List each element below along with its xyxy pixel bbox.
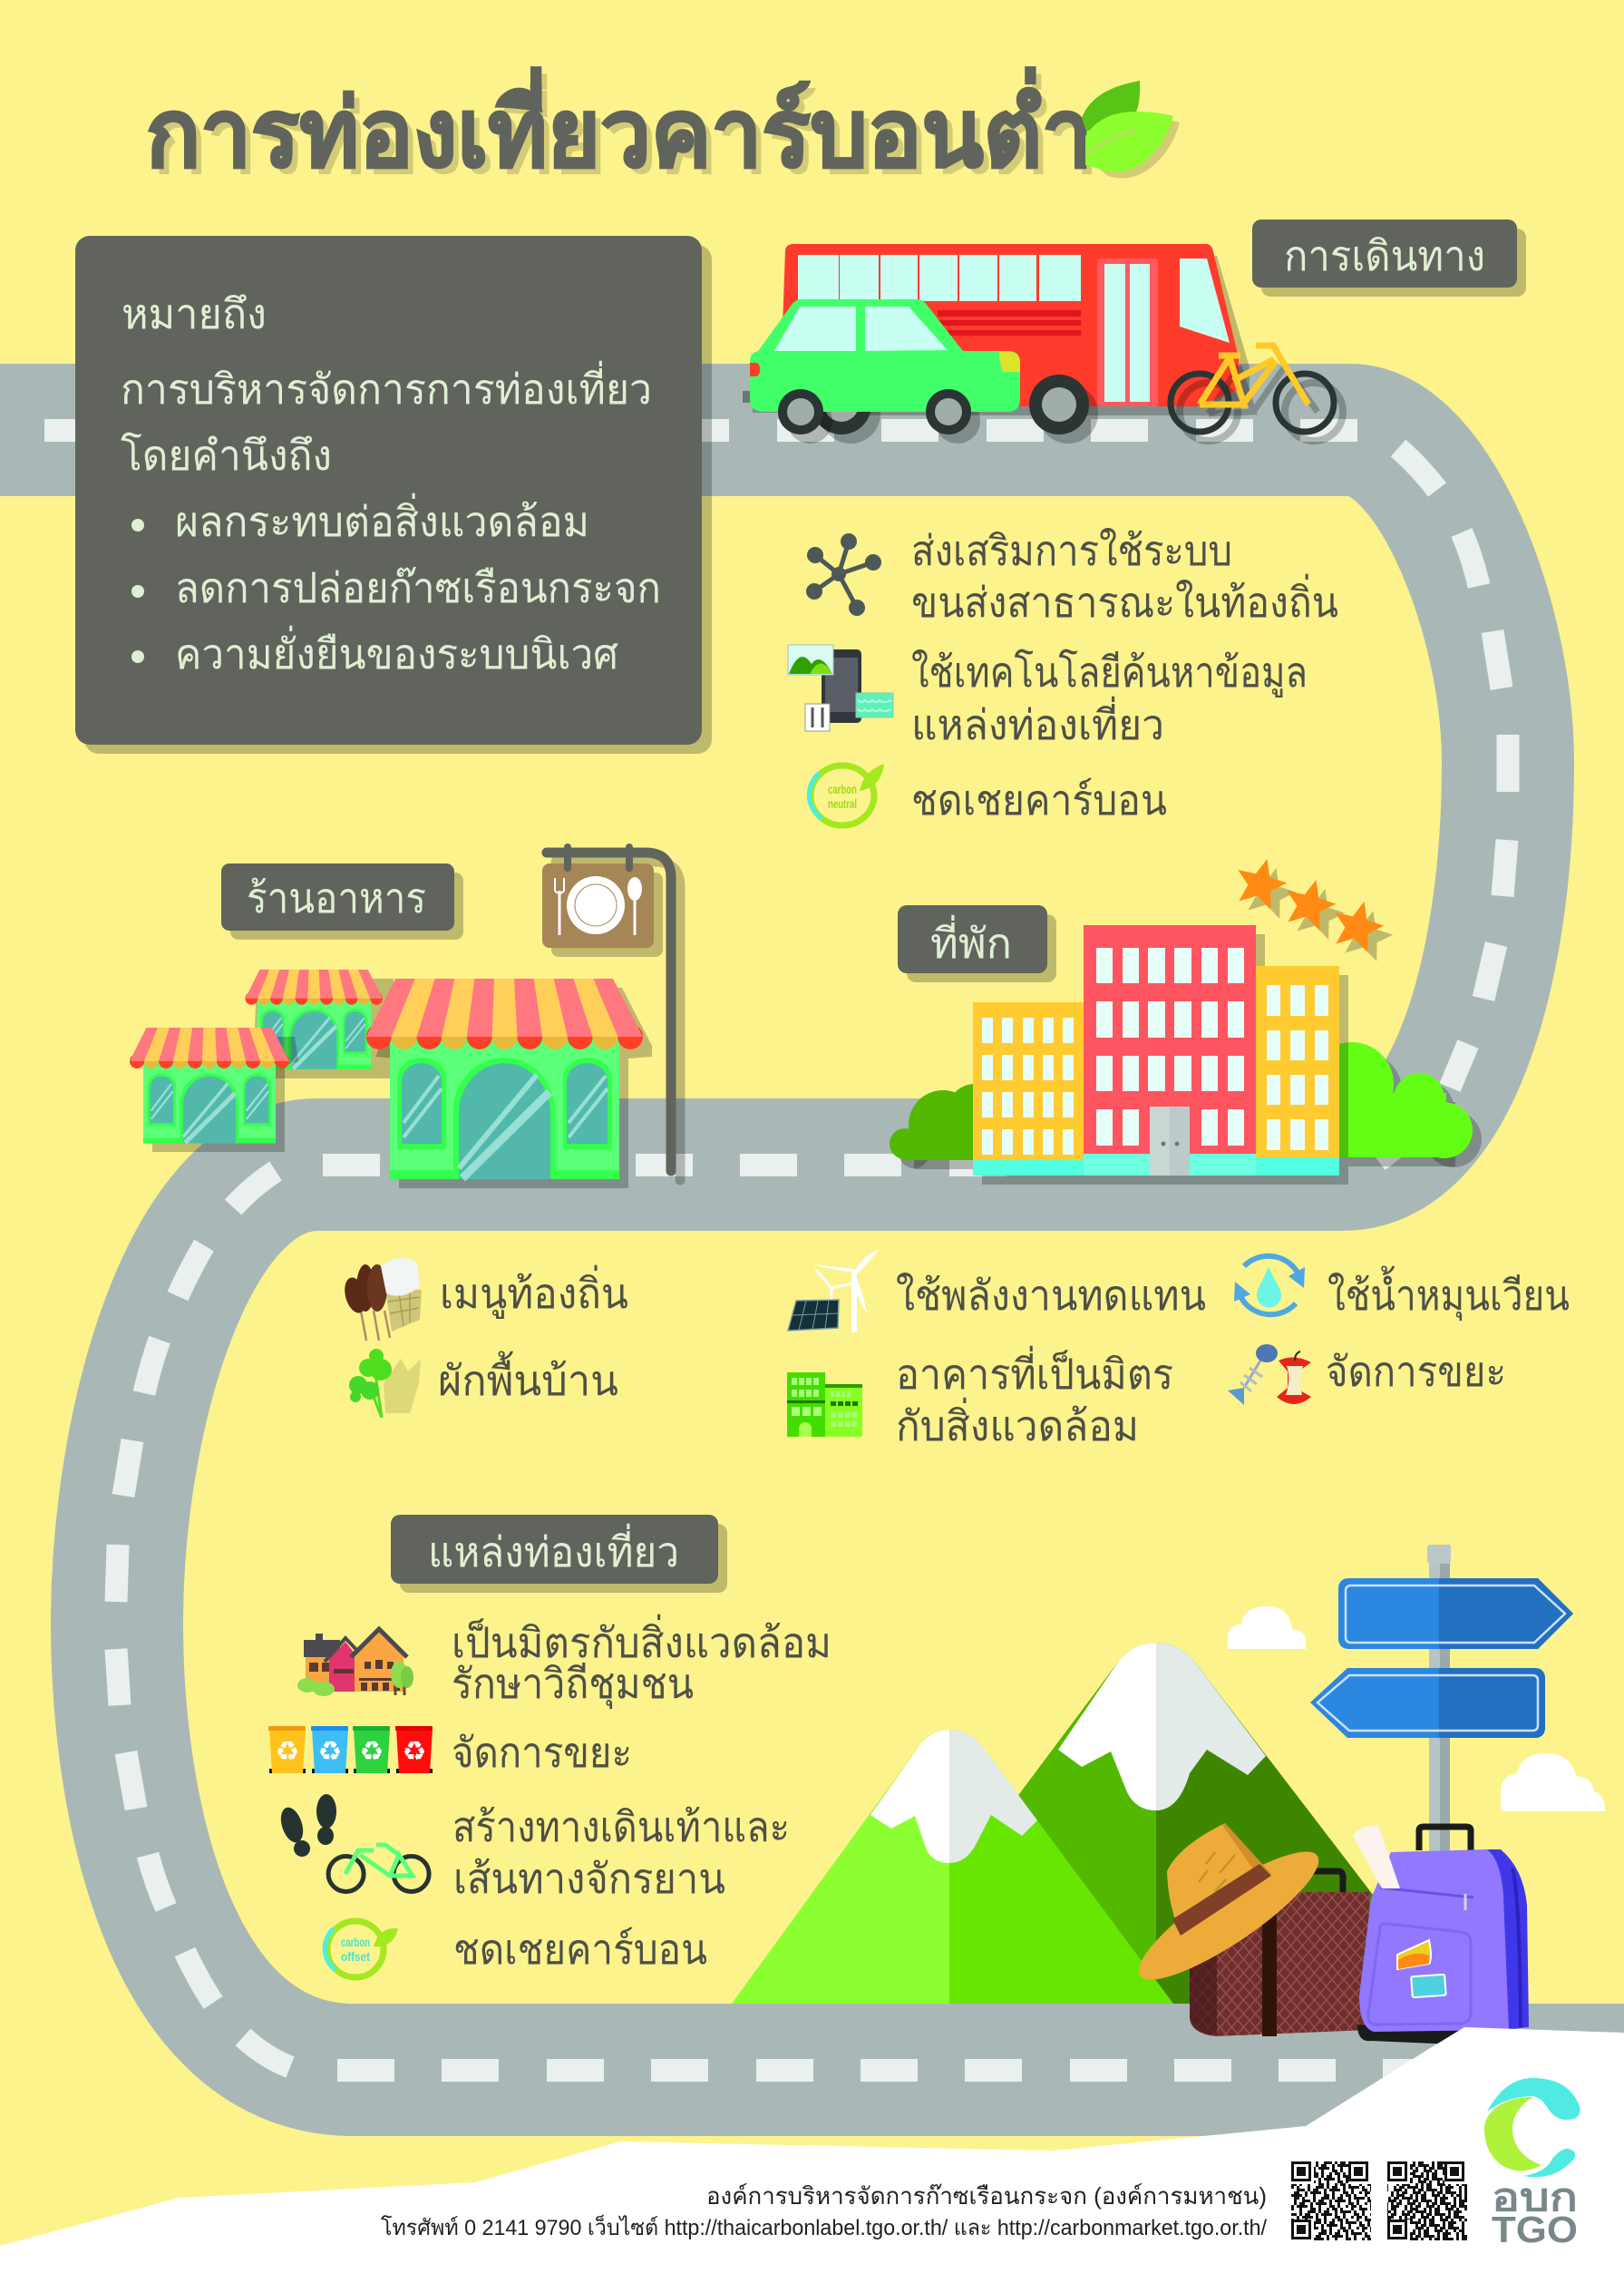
icon: three stars xyxy=(1230,853,1398,963)
text: walking and cycling paths xyxy=(452,1803,790,1902)
text: renewable energy: ใช้พลังงานทดแทน xyxy=(896,1272,1206,1319)
text: green building: อาคารที่เป็นมิตร xyxy=(896,1345,1173,1398)
icon: carbon neutral: carbon xyxy=(828,782,857,796)
label: attractions xyxy=(391,1515,727,1593)
illustration: brown suitcase xyxy=(1190,1871,1369,2036)
icon: recycling bins: ♻ xyxy=(318,1737,342,1767)
QR code 2 xyxy=(1387,2161,1467,2240)
text: public transport: ขนส่งสาธารณะในท้องถิ่น xyxy=(911,573,1338,626)
icon: water recycling xyxy=(1234,1256,1305,1314)
icon: local vegetables xyxy=(349,1349,421,1418)
icon: recycling bins: ♻ xyxy=(276,1737,299,1767)
icon: recycling bins: ♻ xyxy=(360,1737,384,1767)
definition text: ผลกระทบต่อสิ่งแวดล้อม xyxy=(175,493,589,545)
illustration: purple luggage xyxy=(1353,1825,1529,2044)
icon: carbon neutral: neutral xyxy=(828,796,857,811)
icon: carbon offset xyxy=(325,1921,398,1977)
icon: carbon neutral xyxy=(809,764,884,825)
logo: TGO: อบก xyxy=(1492,2176,1578,2219)
logo: TGO xyxy=(1484,2078,1580,2250)
illustration: small restaurant back xyxy=(245,970,394,1078)
definition text: การบริหารจัดการการท่องเที่ยว xyxy=(121,360,652,413)
illustration: small restaurant front xyxy=(130,1028,298,1152)
icon: green building xyxy=(787,1372,862,1437)
logo: TGO: TGO xyxy=(1492,2209,1578,2250)
text: walking and cycling paths: เส้นทางจักรยาน xyxy=(453,1855,725,1902)
icon: title leaves xyxy=(1082,81,1180,179)
illustration: car xyxy=(743,299,1020,444)
text: water recycling: ใช้น้ำหมุนเวียน xyxy=(1327,1265,1570,1322)
text: community: เป็นมิตรกับสิ่งแวดล้อม xyxy=(452,1614,831,1666)
icon: footprints and bicycle xyxy=(277,1794,429,1892)
text: community: รักษาวิถีชุมชน xyxy=(452,1660,694,1710)
icon: community houses xyxy=(297,1629,413,1696)
text: public transport xyxy=(911,527,1338,626)
title: การท่องเที่ยวคาร์บอนต่ำ xyxy=(146,67,1093,187)
text: technology: ใช้เทคโนโลยีค้นหาข้อมูล xyxy=(911,649,1308,698)
definition text: ความยั่งยืนของระบบนิเวศ xyxy=(175,625,618,678)
illustration: bus xyxy=(780,244,1250,444)
illustration: large restaurant xyxy=(366,979,652,1188)
text: waste management attractions: จัดการขยะ xyxy=(452,1729,632,1776)
text: waste management: จัดการขยะ xyxy=(1326,1348,1506,1395)
label: travel: การเดินทาง xyxy=(1284,232,1485,279)
illustration: restaurant sign xyxy=(542,844,680,1180)
label: travel xyxy=(1252,220,1526,297)
text: community xyxy=(452,1614,831,1710)
label: restaurant: ร้านอาหาร xyxy=(247,874,426,922)
label: accommodation xyxy=(898,905,1056,982)
label: accommodation: ที่พัก xyxy=(930,914,1012,967)
definition text xyxy=(121,290,661,678)
text: walking and cycling paths: สร้างทางเดินเท้าและ xyxy=(452,1803,790,1850)
label: restaurant xyxy=(221,863,463,940)
text: carbon neutral: ชดเชยคาร์บอน xyxy=(911,776,1167,824)
icon: waste fish and apple xyxy=(1228,1344,1311,1405)
illustration: clouds xyxy=(1228,1606,1605,1811)
text: green building xyxy=(896,1345,1173,1449)
illustration: straw hat xyxy=(1124,1823,1333,1998)
text: public transport: ส่งเสริมการใช้ระบบ xyxy=(911,527,1232,574)
definition text: ลดการปล่อยก๊าซเรือนกระจก xyxy=(175,564,661,611)
text: local vegetables: ผักพื้นบ้าน xyxy=(438,1351,618,1404)
footer white area xyxy=(0,2027,1624,2283)
icon: carbon offset: carbon xyxy=(341,1935,370,1949)
text: green building: กับสิ่งแวดล้อม xyxy=(896,1397,1139,1449)
icon: phone with cards xyxy=(788,645,893,731)
definition text: โดยคำนึงถึง xyxy=(121,432,332,479)
footer organisation and contact text: องค์การบริหารจัดการก๊าซเรือนกระจก (องค์การมหาชน) xyxy=(706,2182,1267,2210)
icon: renewable energy xyxy=(788,1249,880,1332)
footer organisation and contact text xyxy=(381,2182,1267,2240)
icon: carbon offset: offset xyxy=(341,1949,370,1964)
illustration: trees behind hotel xyxy=(890,1042,1482,1169)
title: การท่องเที่ยวคาร์บอนต่ำ xyxy=(152,73,1099,193)
illustration: signpost xyxy=(1310,1545,1573,1853)
icon: local food xyxy=(341,1258,422,1341)
illustration: hotel xyxy=(973,925,1348,1185)
illustration: bicycle xyxy=(1171,346,1343,441)
icon: network xyxy=(806,533,881,616)
icon: recycling bins xyxy=(268,1726,433,1773)
winding road xyxy=(0,419,1624,2082)
text: local menu: เมนูท้องถิ่น xyxy=(440,1264,628,1319)
illustration: mountains xyxy=(732,1643,1456,2004)
icon: recycling bins: ♻ xyxy=(403,1737,426,1767)
panel: definition xyxy=(75,236,712,754)
text: carbon offset: ชดเชยคาร์บอน xyxy=(453,1926,707,1973)
footer organisation and contact text: โทรศัพท์ 0 2141 9790 เว็บไซต์ http://thaicarbonlabel.tgo.or.th/ และ http://carbonmarket.tgo.or.th/ xyxy=(381,2214,1267,2240)
label: attractions: แหล่งท่องเที่ยว xyxy=(428,1523,679,1576)
text: technology: แหล่งท่องเที่ยว xyxy=(911,696,1164,748)
text: technology xyxy=(911,649,1308,748)
QR code 1 xyxy=(1291,2161,1371,2240)
definition text: หมายถึง xyxy=(122,290,267,337)
